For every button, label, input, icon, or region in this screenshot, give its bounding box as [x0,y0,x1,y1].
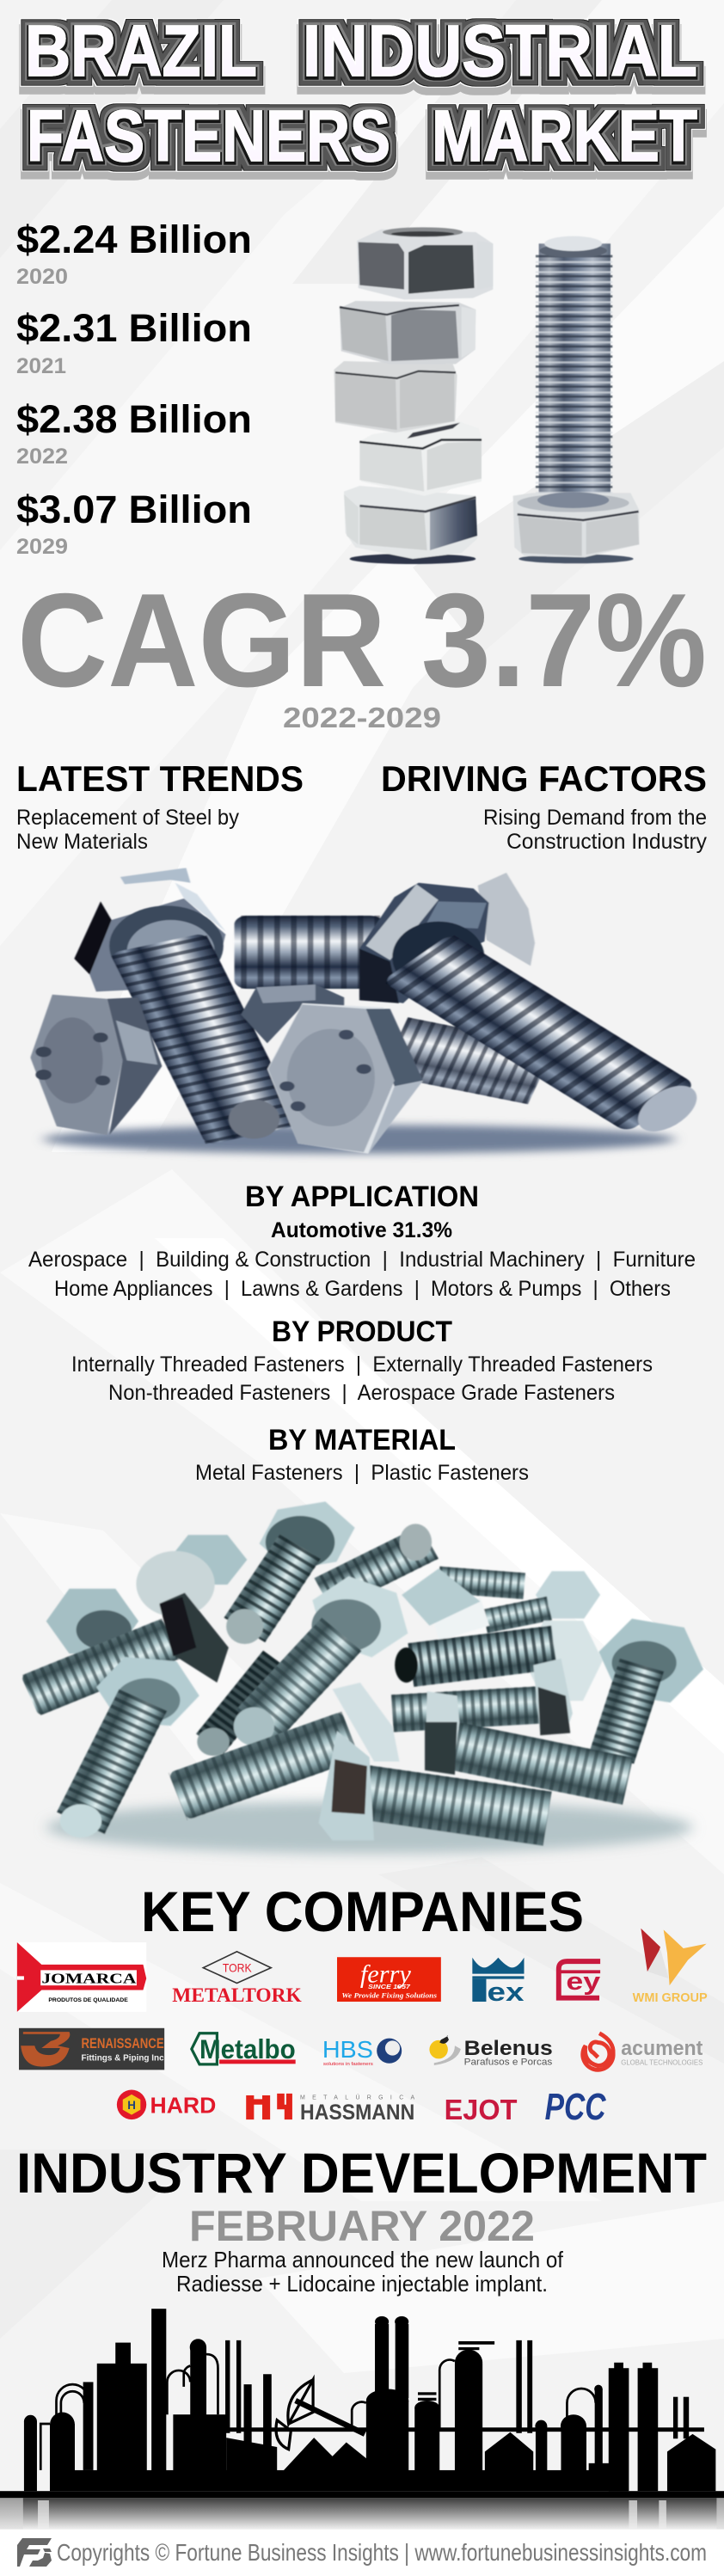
pump jack [276,2380,365,2450]
CAGR period: 2022-2029 [283,702,441,733]
logo: Fey: ey [566,1968,600,1996]
latest trends: LATEST TRENDS [16,758,304,799]
development text: Merz Pharma announced the new launch of [162,2247,564,2272]
bolt C head [359,883,488,1003]
driving factors: Construction Industry [506,830,707,854]
logo: Metaltork: TORK [223,1961,252,1975]
logo: Renaissance: Fittings & Piping Inc [82,2054,164,2064]
logo: Belenus: Parafusos e Porcas [464,2057,553,2067]
bolt C shaft [382,933,696,1133]
logo: Renaissance: RENAISSANCE [82,2036,164,2052]
logo: Belenus: Belenus [464,2038,553,2060]
company logos [17,1929,708,2128]
logo: Jomarca: PRODUTOS DE QUALIDADE [48,1997,128,2003]
value 2029: 2029 [16,535,68,559]
nut 2 [340,301,476,364]
upper thin bolts [438,1567,552,1633]
development date: FEBRUARY 2022 [189,2202,535,2250]
value 2022: $2.38 Billion [16,397,252,441]
latest trends: New Materials [16,830,148,854]
value 2020 [16,218,252,289]
by product: BY PRODUCT [272,1316,452,1348]
logo: Acument: GLOBAL TECHNOLOGIES [621,2058,703,2066]
value 2020: 2020 [16,265,68,289]
dark bolt [196,1651,291,1756]
back horizontal bolt [235,916,383,989]
logo: WMI Group [633,1929,708,2005]
logo: PCC: PCC [545,2087,606,2128]
market size values [16,218,252,559]
logo: Hard [117,2090,216,2119]
skyline reflection [0,2498,724,2529]
nut 1 [357,227,493,299]
wedge head [434,1597,489,1641]
mid right bolt [391,1659,573,1735]
logo: Metalbo: Metalbo [199,2034,296,2064]
skyline silhouette [0,2309,724,2498]
value 2022: 2022 [16,445,68,469]
by application: Home Appliances | Lawns & Gardens | Motors & Pumps | Others [54,1277,671,1301]
by product: Internally Threaded Fasteners | Externally Threaded Fasteners [71,1352,653,1377]
right horizontal bolt [395,1621,603,1701]
development text: Radiesse + Lidocaine injectable implant. [176,2271,548,2297]
title: BRAZIL [25,10,257,91]
logo: Ferry [337,1957,441,2002]
left long bolt [21,1592,229,1716]
logo: HBS [322,2036,402,2067]
value 2029 [16,488,252,559]
logo: HBS: HBS [322,2036,373,2063]
value 2021: 2021 [16,354,66,378]
logo: Ferry: We Provide Fixing Solutions [341,1992,437,2000]
bottom left bolt [169,1711,360,1820]
footer [0,2530,724,2576]
logo: Rex [472,1958,525,2007]
bolt head D [30,995,162,1135]
front shaft behind head E [381,1017,555,1104]
title: FASTENERS [27,95,390,176]
logo: Fey [559,1961,600,1998]
central bolt [234,1568,420,1745]
by application: BY APPLICATION [245,1181,479,1213]
small nut [241,984,344,1043]
icon: Fortune Business Insights logo [17,2538,52,2567]
bottom bolt [319,1731,552,1846]
by material: Metal Fasteners | Plastic Fasteners [195,1461,529,1485]
logo: Hassmann: HASSMANN [300,2101,414,2125]
logo: Metaltork: METALTORK [172,1984,302,2007]
logo: Hard: HARD [150,2094,216,2119]
logo: Jomarca: JOMARCA [41,1970,137,1986]
leading segment: Automotive 31.3% [271,1218,452,1242]
logo: Acument: acument [621,2038,703,2060]
driving factors: Rising Demand from the [483,806,707,830]
logo: Jomarca [17,1942,146,2012]
value 2021: $2.31 Billion [16,306,252,350]
latest trends: Replacement of Steel by [16,806,239,830]
value 2029: $3.07 Billion [16,488,252,531]
value 2021 [16,306,252,378]
nut 5 [344,486,477,559]
logo: EJOT: EJOT [445,2095,518,2126]
latest trends [16,758,304,854]
top center tip bolt [314,1524,439,1611]
nut 3 [334,361,457,432]
logo: HBS: solutions in fasteners [323,2062,373,2067]
driving factors [381,758,707,854]
by product: Non-threaded Fasteners | Aerospace Grade Fasteners [108,1381,615,1405]
image: large bolts [30,868,709,1154]
bolt [513,236,639,557]
by material [195,1424,529,1485]
image: stacked nuts and bolt [334,227,639,564]
nut 4 [359,421,482,496]
value 2020: $2.24 Billion [16,218,252,261]
logo: Hard: H [127,2098,136,2112]
driving factors: DRIVING FACTORS [381,758,707,799]
bolt A tip [229,1100,279,1138]
by material: BY MATERIAL [268,1424,456,1457]
front left bolt [57,1655,202,1837]
logo: Ferry: SINCE 1957 [368,1984,411,1990]
by product [71,1316,653,1405]
value 2022 [16,397,252,469]
logo: Rex: ex [488,1978,525,2007]
bolt A shaft [110,933,302,1145]
bolt C tip [626,1079,709,1138]
logo: WMI Group: WMI GROUP [633,1990,708,2005]
logo: Hassmann [246,2093,415,2125]
development text [162,2247,564,2297]
logo: Hassmann: METALÚRGICA [300,2093,415,2101]
title [25,10,697,176]
logo: Renaissance [19,2028,164,2070]
by application: Aerospace | Building & Construction | Industrial Machinery | Furniture [28,1248,696,1272]
far right bolt [590,1615,710,1763]
curved head [333,1683,400,1762]
top bolt [224,1498,360,1644]
image: pile of bolts [21,1498,710,1854]
logo: Acument [583,2033,703,2070]
lower long bolt [425,1691,633,1805]
logo: Metaltork [172,1952,302,2007]
back bolt head [478,873,535,966]
key companies heading: KEY COMPANIES [141,1880,584,1943]
by application [28,1181,696,1301]
logo: Ferry: ferry [360,1960,411,1988]
logo: Belenus [429,2035,553,2067]
bolt head E [267,1003,423,1154]
bolt A head [74,868,225,991]
